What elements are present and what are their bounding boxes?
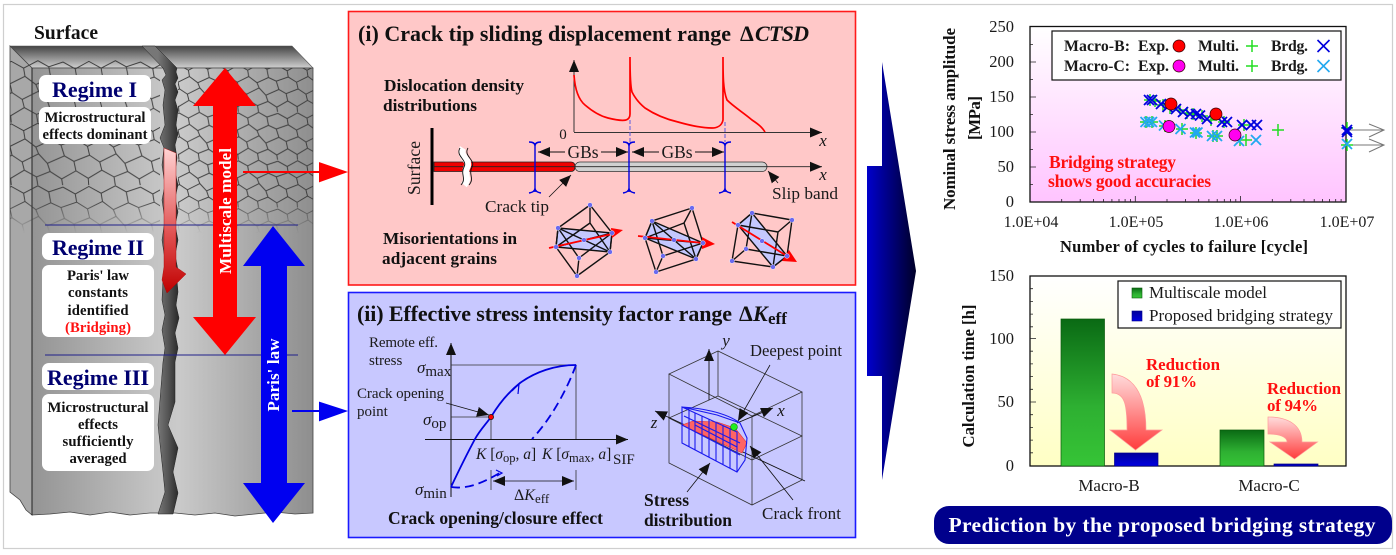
y-axis tick labels: 250 bbox=[989, 17, 1014, 36]
label: deepest point: Deepest point bbox=[750, 341, 842, 360]
label: stress distribution: distribution bbox=[644, 510, 732, 530]
panel heading: eff bbox=[768, 309, 787, 328]
legend: Proposed bridging strategy bbox=[1149, 306, 1334, 325]
data: multiscale predictions bbox=[1140, 94, 1353, 151]
legend: Macro-B: bbox=[1064, 38, 1130, 55]
regime II description: (Bridging) bbox=[65, 320, 131, 336]
chart: crack opening/closure: max bbox=[425, 364, 452, 380]
y-axis tick labels: 150 bbox=[989, 87, 1014, 106]
y-axis tick labels bbox=[989, 266, 1014, 475]
regime III description: averaged bbox=[70, 451, 126, 467]
banner: prediction by the proposed bridging strategy: Prediction by the proposed bridging strategy bbox=[948, 513, 1376, 537]
regime I description bbox=[39, 107, 151, 144]
panel heading: K bbox=[752, 301, 769, 326]
banner: prediction by the proposed bridging strategy bbox=[934, 506, 1392, 544]
y-axis tick labels: 100 bbox=[989, 329, 1014, 348]
annotation: reduction of 94%: Reduction bbox=[1267, 379, 1342, 398]
diagram: crack along slip band bbox=[404, 128, 827, 205]
label: stress distribution bbox=[644, 463, 732, 530]
arrow: multiscale model range bbox=[193, 68, 256, 355]
chart: crack opening/closure: point bbox=[357, 404, 389, 420]
label: crack front: Crack front bbox=[762, 504, 841, 523]
chart: crack opening/closure: eff bbox=[535, 491, 550, 506]
legend: Brdg. bbox=[1271, 58, 1308, 75]
label: grain boundaries: GBs bbox=[661, 142, 693, 162]
regime II description: Paris' law bbox=[67, 268, 129, 284]
y-axis title bbox=[940, 28, 984, 210]
y-axis tick labels: 50 bbox=[998, 157, 1014, 176]
chart: crack opening/closure: , bbox=[591, 446, 598, 463]
chart: crack opening/closure: Remote eff. bbox=[369, 335, 438, 351]
label: slip band bbox=[768, 171, 838, 203]
diagram: 3D crack and stress distribution: x bbox=[776, 401, 785, 420]
legend: Exp. bbox=[1138, 58, 1169, 75]
y-axis title: [MPa] bbox=[965, 96, 984, 140]
chart: crack opening/closure: K [σ bbox=[542, 446, 569, 463]
regime I label: Regime I bbox=[52, 77, 137, 102]
chart: dislocation density curve: 0 bbox=[559, 127, 567, 143]
regime II description: constants bbox=[68, 285, 128, 301]
label: stress distribution: Stress bbox=[644, 490, 689, 510]
regime III description: effects bbox=[78, 417, 118, 433]
legend bbox=[1118, 281, 1341, 328]
diagram: crack along slip band: Surface bbox=[404, 141, 424, 195]
x-axis labels bbox=[1078, 476, 1300, 495]
icon: crystal grain 2 bbox=[638, 206, 715, 274]
x-axis tick labels bbox=[1004, 214, 1374, 231]
label: grain boundaries: GBs bbox=[567, 142, 599, 162]
regime III description: Microstructural bbox=[48, 400, 148, 416]
y-axis tick labels: 150 bbox=[989, 266, 1014, 285]
chart: crack opening/closure: Crack opening bbox=[357, 386, 444, 402]
label: misorientations: adjacent grains bbox=[382, 249, 497, 268]
chart: crack opening/closure: op bbox=[431, 416, 446, 432]
chart: crack opening/closure: a] bbox=[523, 446, 536, 463]
regime III description: sufficiently bbox=[62, 434, 134, 450]
label: misorientations bbox=[382, 229, 517, 268]
chart: crack opening/closure: σ bbox=[423, 410, 431, 429]
icon: crystal grain 1 bbox=[549, 203, 623, 278]
panel heading: (i) Crack tip sliding displacement range bbox=[358, 21, 731, 46]
legend: Multiscale model bbox=[1149, 283, 1267, 302]
plot area bbox=[1030, 276, 1346, 466]
y-axis tick labels: 50 bbox=[998, 392, 1014, 411]
caption: crack opening/closure effect: Crack opening/closure effect bbox=[388, 508, 603, 528]
x-axis labels: Macro-C bbox=[1238, 476, 1300, 495]
regime II description: identified bbox=[68, 303, 128, 319]
y-axis tick labels: 0 bbox=[1006, 192, 1014, 211]
chart: crack opening/closure: min bbox=[423, 486, 447, 502]
chart: calculation time bbox=[959, 266, 1346, 495]
crack bbox=[142, 46, 179, 514]
arrow: multiscale model range: Multiscale model bbox=[216, 148, 235, 274]
data: macro-B bridging predictions bbox=[1144, 95, 1352, 137]
panel heading: Δ bbox=[739, 301, 753, 326]
chart: dislocation density curve: x bbox=[818, 131, 827, 150]
arrow: Paris' law to K panel bbox=[292, 403, 345, 420]
arrow: Paris' law range: Paris' law bbox=[264, 338, 283, 412]
annotation: bridging accuracy bbox=[1048, 152, 1211, 191]
label: dislocation density bbox=[383, 76, 524, 115]
label: grain boundaries bbox=[538, 142, 724, 162]
arrow: multiscale to CTSD panel bbox=[243, 164, 345, 181]
x-axis tick labels: 1.0E+04 bbox=[1004, 214, 1058, 231]
y-axis tick labels: 100 bbox=[989, 122, 1014, 141]
plot area bbox=[1030, 26, 1346, 202]
chart: crack opening/closure: SIF bbox=[613, 452, 635, 468]
data: macro-C bridging predictions bbox=[1140, 117, 1352, 149]
x-axis tick labels: 1.0E+05 bbox=[1109, 214, 1163, 231]
panel heading: Δ bbox=[740, 21, 754, 46]
label: crack front bbox=[750, 446, 841, 523]
regime I description: effects dominant bbox=[42, 127, 148, 143]
arrow: big navy arrow to results bbox=[867, 62, 916, 480]
bars: Macro-C bbox=[1220, 430, 1318, 466]
chart: crack opening/closure: K [σ bbox=[476, 446, 503, 463]
annotation: reduction of 91% bbox=[1146, 355, 1221, 391]
arrow: reduction Macro-C bbox=[1268, 417, 1318, 459]
heading: surface: Surface bbox=[34, 23, 98, 44]
x-axis title: Number of cycles to failure [cycle] bbox=[1060, 237, 1308, 256]
x-axis tick labels: 1.0E+06 bbox=[1214, 214, 1268, 231]
label: deepest point bbox=[738, 341, 842, 421]
panel heading: CTSD bbox=[755, 21, 809, 46]
label: dislocation density: distributions bbox=[383, 96, 477, 115]
legend: Multi. bbox=[1198, 58, 1239, 75]
run-out arrows bbox=[1347, 124, 1384, 152]
chart: crack opening/closure: σ bbox=[415, 480, 423, 499]
regime III description bbox=[42, 394, 154, 471]
y-axis tick labels: 200 bbox=[989, 52, 1014, 71]
chart: crack opening/closure: op bbox=[503, 451, 516, 465]
chart: dislocation density curve bbox=[559, 57, 827, 150]
specimen block bbox=[10, 46, 313, 516]
annotation: reduction of 91%: Reduction bbox=[1146, 355, 1221, 374]
bars: Macro-B bbox=[1061, 319, 1158, 466]
legend: Macro-C: bbox=[1064, 58, 1130, 75]
data: experiments bbox=[1163, 98, 1241, 141]
regime I description: Microstructural bbox=[44, 110, 146, 126]
x-axis tick labels: 1.0E+07 bbox=[1320, 214, 1374, 231]
diagram: 3D crack and stress distribution: z bbox=[650, 413, 658, 432]
legend bbox=[1052, 31, 1341, 80]
label: crack tip bbox=[485, 175, 571, 216]
panel: (ii) effective stress intensity factor bbox=[348, 292, 856, 538]
y-axis tick labels: 0 bbox=[1006, 456, 1014, 475]
regime II label: Regime II bbox=[52, 235, 144, 260]
annotation: reduction of 94% bbox=[1267, 379, 1342, 415]
annotation: reduction of 91%: of 91% bbox=[1146, 372, 1197, 391]
icon: crystal grain 3 bbox=[730, 211, 797, 269]
annotation: bridging accuracy: shows good accuracies bbox=[1048, 171, 1211, 191]
y-axis title: Calculation time [h] bbox=[959, 304, 978, 448]
legend: Multi. bbox=[1198, 38, 1239, 55]
crack region: bridging zone bbox=[162, 148, 186, 293]
chart: crack opening/closure bbox=[357, 335, 635, 506]
chart: crack opening/closure: σ bbox=[417, 358, 425, 377]
regime II description bbox=[42, 265, 154, 337]
chart: crack opening/closure: stress bbox=[369, 353, 402, 369]
regime III label: Regime III bbox=[47, 365, 149, 390]
y-axis title: Nominal stress amplitude bbox=[940, 28, 959, 210]
y-axis tick labels bbox=[989, 17, 1014, 211]
label: dislocation density: Dislocation density bbox=[384, 76, 524, 95]
arrow: reduction Macro-B bbox=[1110, 374, 1162, 450]
legend: Brdg. bbox=[1271, 38, 1308, 55]
label: misorientations: Misorientations in bbox=[383, 229, 517, 248]
annotation: bridging accuracy: Bridging strategy bbox=[1049, 152, 1176, 172]
diagram: crack along slip band: x bbox=[818, 165, 827, 184]
label: slip band: Slip band bbox=[772, 184, 838, 203]
annotation: reduction of 94%: of 94% bbox=[1267, 396, 1318, 415]
diagram: 3D crack and stress distribution bbox=[650, 331, 805, 505]
chart: crack opening/closure: ΔK bbox=[514, 487, 535, 504]
arrow: Paris' law range bbox=[243, 226, 305, 523]
label: crack tip: Crack tip bbox=[485, 197, 549, 216]
chart: S-N curve bbox=[940, 17, 1384, 256]
diagram: 3D crack and stress distribution: y bbox=[720, 331, 730, 350]
legend: Exp. bbox=[1138, 38, 1169, 55]
x-axis labels: Macro-B bbox=[1078, 476, 1140, 495]
chart: crack opening/closure: , bbox=[516, 446, 523, 463]
chart: crack opening/closure: max bbox=[569, 451, 591, 465]
panel: specimen with crack regimes bbox=[10, 23, 345, 523]
regime boundaries bbox=[45, 225, 298, 355]
panel heading: (ii) Effective stress intensity factor range bbox=[357, 301, 732, 326]
panel: (i) crack tip sliding displacement bbox=[348, 12, 856, 285]
chart: crack opening/closure: a] bbox=[598, 446, 611, 463]
